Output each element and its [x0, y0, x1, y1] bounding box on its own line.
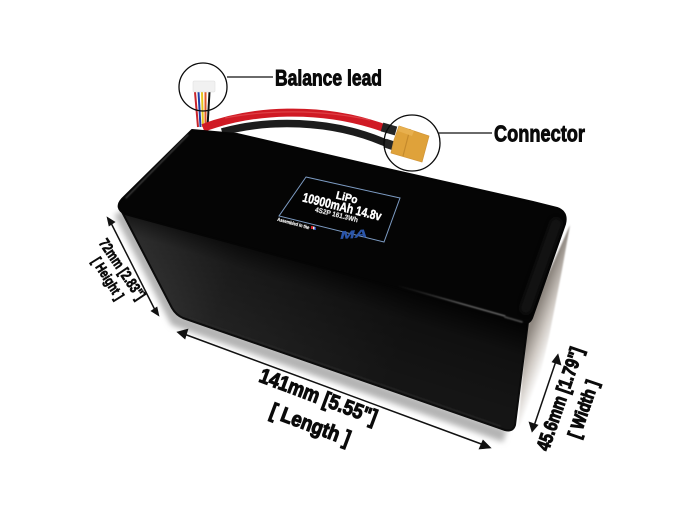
battery pack: [119, 92, 570, 436]
callout circle: [179, 63, 227, 111]
icon: flag: [311, 226, 316, 230]
arrow: [107, 217, 159, 316]
top face: [119, 130, 566, 323]
ground shadow: [120, 212, 505, 436]
leader line: [438, 132, 492, 134]
front face: [120, 208, 528, 430]
arrow: [177, 329, 491, 449]
edge highlights: [126, 135, 556, 426]
dimension: width: [529, 345, 603, 454]
front face shading: [120, 208, 528, 430]
arrow: [529, 354, 561, 432]
label text: chemistry: LiPo: [335, 190, 359, 207]
height label: [ Height ]: [89, 254, 127, 303]
label text: capacity and voltage: 10900mAh 14.8v: [301, 190, 384, 224]
black power wire: [222, 123, 388, 144]
width value: 45.6mm [1.79"]: [533, 345, 588, 454]
dimension: height: [89, 217, 159, 316]
callout circle: [384, 115, 440, 171]
length value: 141mm [5.55"]: [256, 364, 380, 429]
balance lead plug: [193, 81, 215, 92]
width label: [ Width ]: [564, 377, 603, 441]
label: Connector: [494, 120, 585, 146]
right side reflection: [518, 225, 570, 428]
balance lead wires: [195, 92, 210, 127]
red power wire: [203, 112, 384, 128]
logo: MA: [339, 228, 369, 242]
label text: assembled: Assembled in the: [277, 217, 310, 231]
length label: [ Length ]: [267, 399, 354, 450]
connector boots: [382, 127, 396, 146]
label border: [279, 177, 400, 242]
label: Balance lead: [275, 66, 382, 90]
label text: configuration: 4S2P 161.3Wh: [314, 207, 359, 224]
height value: 72mm [2.83"]: [95, 236, 148, 303]
callout: connector: [384, 115, 585, 171]
dimension: length: [177, 329, 491, 450]
battery label: [277, 177, 400, 242]
callout: balance lead: [179, 63, 382, 111]
leader line: [227, 76, 273, 78]
XT connector: [391, 126, 429, 162]
